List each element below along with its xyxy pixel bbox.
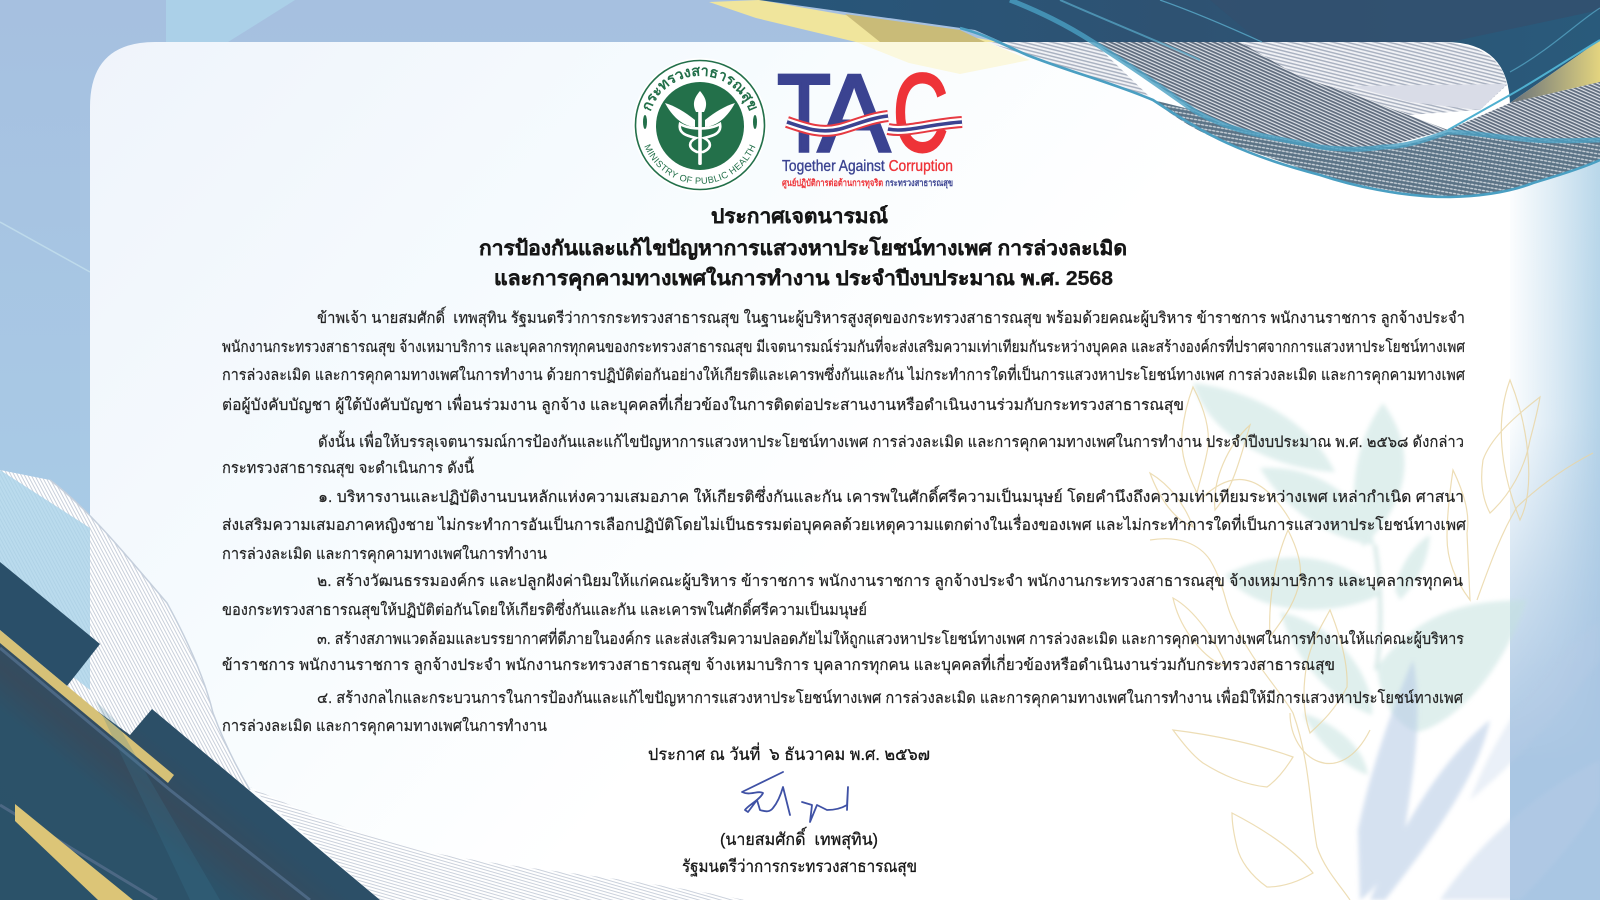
title heading: ประกาศเจตนารมณ์ [711, 205, 888, 228]
bottom left navy shapes [0, 562, 380, 900]
title heading: และการคุกคามทางเพศในการทำงาน ประจำปีงบประมาณ พ.ศ. 2568 [494, 266, 1113, 291]
letter T: T [777, 52, 831, 175]
body text: item 1 [222, 485, 1466, 564]
top right navy shape [709, 0, 1600, 103]
seal side sprigs [643, 115, 757, 129]
body text: item 3 [222, 628, 1464, 675]
signature [742, 772, 848, 822]
body text: item 3: ๓. สร้างสภาพแวดล้อมและบรรยากาศที่ดีภายในองค์กร และส่งเสริมความปลอดภัยไม่ให้ถูกแสวงหาประโยชน์ทางเพศ การล่วงละเมิด และการคุกคามทางเพศในการทำงานให้แก่คณะผู้บริหาร [317, 628, 1464, 649]
seal text: Thai: กระทรวงสาธารณสุข [644, 66, 757, 111]
body text: item 2: ของกระทรวงสาธารณสุขให้ปฏิบัติต่อกันโดยให้เกียรติซึ่งกันและกัน และเคารพในศักดิ์ศรีความเป็นมนุษย์ [222, 598, 867, 620]
body text: item 4 [222, 687, 1463, 736]
title heading: การป้องกันและแก้ไขปัญหาการแสวงหาประโยชน์ทางเพศ การล่วงละเมิด [479, 236, 1127, 260]
body text: item 2: ๒. สร้างวัฒนธรรมองค์กร และปลูกฝังค่านิยมให้แก่คณะผู้บริหาร ข้าราชการ พนักงานราชการ ลูกจ้างประจำ พนักงานกระทรวงสาธารณสุข จ้างเหมาบริการ และบุคลากรทุกคน [317, 572, 1463, 591]
body text: item 2 [222, 572, 1463, 620]
body text: item 1: การล่วงละเมิด และการคุกคามทางเพศในการทำงาน [222, 545, 547, 564]
body text: declaration [222, 306, 1465, 415]
title heading [479, 205, 1127, 291]
body text: item 3: ข้าราชการ พนักงานราชการ ลูกจ้างประจำ พนักงานกระทรวงสาธารณสุข จ้างเหมาบริการ บุคลากรทุกคน และบุคคลที่เกี่ยวข้องหรือดำเนินงานร่วมกับกระทรวงสาธารณสุข [222, 654, 1335, 675]
body text: item 4: การล่วงละเมิด และการคุกคามทางเพศในการทำงาน [222, 717, 547, 736]
TAC Thai subtitle: ศูนย์ปฏิบัติการต่อต้านการทุจริต กระทรวงสาธารณสุข [782, 177, 953, 190]
body text: declaration: ต่อผู้บังคับบัญชา ผู้ใต้บังคับบัญชา เพื่อนร่วมงาน ลูกจ้าง และบุคคลที่เกี่ยวข้องในการติดต่อประสานงานหรือดำเนินงานร่วมกับกระทรวงสาธารณสุข [222, 394, 1184, 415]
signer name: (นายสมศักดิ์ เทพสุทิน) [720, 827, 878, 850]
body text: declaration: พนักงานกระทรวงสาธารณสุข จ้างเหมาบริการ และบุคลากรทุกคนของกระทรวงสาธารณสุข มีเจตนารมณ์ร่วมกันที่จะส่งเสริมความเท่าเทียมกันระหว่างบุคคล และสร้างองค์กรที่ปราศจากการแสวงหาประโยชน์ทางเพศ [222, 336, 1465, 357]
body text: item 1: ส่งเสริมความเสมอภาคหญิงชาย ไม่กระทำการอันเป็นการเลือกปฏิบัติโดยไม่เป็นธรรมต่อบุคคลด้วยเหตุความแตกต่างในเรื่องของเพศ และไม่กระทำการใดที่เป็นการแสวงหาประโยชน์ทางเพศ [222, 514, 1466, 535]
body text: purpose [222, 430, 1464, 478]
letter C: C [893, 52, 948, 175]
blue watercolor leaves [1358, 620, 1600, 900]
gold outlined leaves [1150, 380, 1593, 900]
logo: TAC [777, 52, 962, 190]
TAC tagline: Together Against Corruption [782, 158, 953, 175]
body text: declaration: ข้าพเจ้า นายสมศักดิ์ เทพสุทิน รัฐมนตรีว่าการกระทรวงสาธารณสุข ในฐานะผู้บริหารสูงสุดของกระทรวงสาธารณสุข พร้อมด้วยคณะผู้บริหาร ข้าราชการ พนักงานราชการ ลูกจ้างประจำ [317, 306, 1465, 328]
body text: item 4: ๔. สร้างกลไกและกระบวนการในการป้องกันและแก้ไขปัญหาการแสวงหาประโยชน์ทางเพศ การล่วงละเมิด และการคุกคามทางเพศในการทำงาน เพื่อมิให้มีการแสวงหาประโยชน์ทางเพศ [317, 687, 1463, 708]
body text: declaration: การล่วงละเมิด และการคุกคามทางเพศในการทำงาน ด้วยการปฏิบัติต่อกันอย่างให้เกียรติและเคารพซึ่งกันและกัน ไม่กระทำการใดที่เป็นการแสวงหาประโยชน์ทางเพศ การล่วงละเมิด และการคุกคามทางเพศ [222, 364, 1465, 385]
declaration date: ประกาศ ณ วันที่ ๖ ธันวาคม พ.ศ. ๒๕๖๗ [648, 742, 930, 764]
wave: bottom left mesh [0, 470, 745, 900]
body text: purpose: ดังนั้น เพื่อให้บรรลุเจตนารมณ์การป้องกันและแก้ไขปัญหาการแสวงหาประโยชน์ทางเพศ การล่วงละเมิด และการคุกคามทางเพศในการทำงาน ประจำปีงบประมาณ พ.ศ. ๒๕๖๘ ดังกล่าว [318, 430, 1464, 452]
wave: top right mesh [960, 0, 1600, 197]
letter A: A [818, 52, 891, 175]
Thai flag ribbon [787, 116, 962, 131]
body text: purpose: กระทรวงสาธารณสุข จะดำเนินการ ดังนี้ [222, 456, 474, 478]
teal watercolor leaves [1193, 383, 1527, 775]
logo: Ministry of Public Health seal [633, 58, 766, 190]
seal text: English: MINISTRY OF PUBLIC HEALTH [644, 144, 756, 184]
pale yellow band on panel [856, 42, 1030, 74]
icon: caduceus [665, 91, 735, 165]
signer position: รัฐมนตรีว่าการกระทรวงสาธารณสุข [682, 857, 917, 877]
body text: item 1: ๑. บริหารงานและปฏิบัติงานบนหลักแห่งความเสมอภาค ให้เกียรติซึ่งกันและกัน เคารพในศักดิ์ศรีความเป็นมนุษย์ โดยคำนึงถึงความเท่าเทียมระหว่างเพศ เหล่ากำเนิด ศาสนา [318, 485, 1464, 507]
